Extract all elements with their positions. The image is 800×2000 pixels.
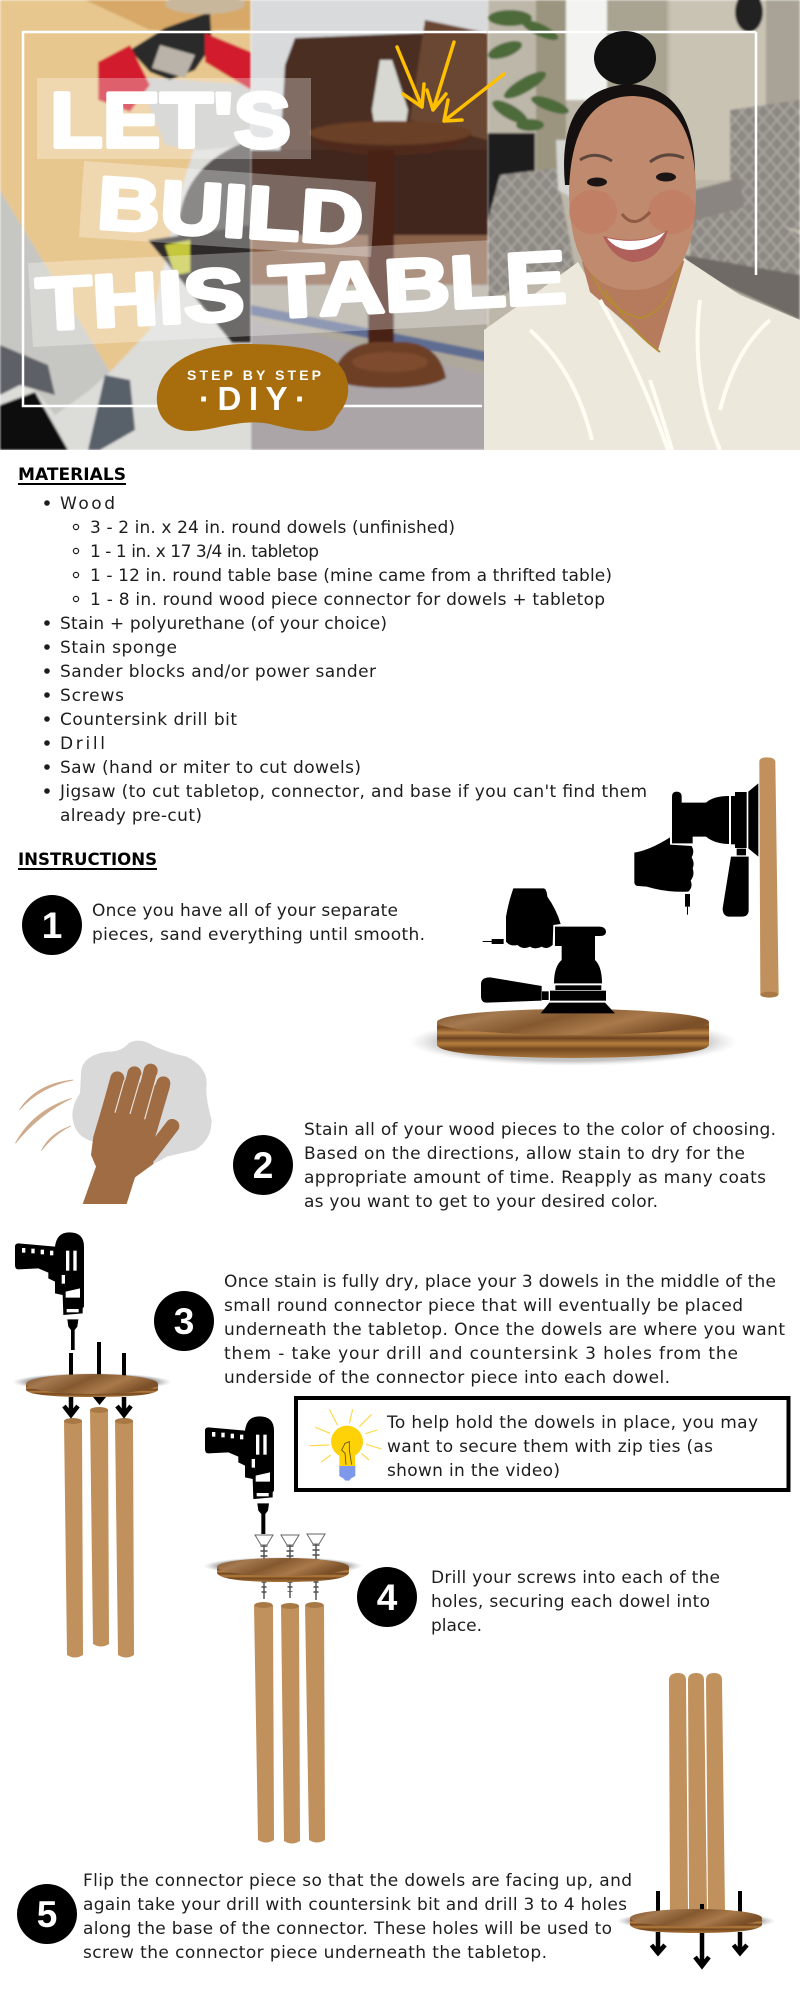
heading: instructions: INSTRUCTIONS — [18, 850, 157, 870]
materials list: Stain sponge — [60, 638, 177, 658]
step 4 text: Drill your screws into each of the — [431, 1568, 720, 1588]
step 2 text: as you want to get to your desired color. — [304, 1192, 658, 1212]
badge: step by step DIY: ·DIY· — [199, 380, 306, 417]
dowels and connector step 3 — [12, 1342, 172, 1658]
step 3 badge: 3 — [174, 1301, 194, 1342]
materials list: Drill — [60, 734, 105, 754]
icon: sander — [481, 888, 615, 1013]
icon: drill step 3 — [15, 1232, 84, 1350]
materials list — [44, 494, 647, 826]
step 5 badge: 5 — [37, 1894, 57, 1935]
step 1 badge — [22, 895, 82, 955]
materials list: 3 - 2 in. x 24 in. round dowels (unfinished) — [90, 518, 455, 538]
step 5 text: Flip the connector piece so that the dowels are facing up, and — [83, 1871, 632, 1891]
materials list: 1 - 1 in. x 17 3/4 in. tabletop — [90, 542, 319, 562]
title: THIS TABLE: THIS TABLE — [34, 235, 568, 346]
step 3 text: Once stain is fully dry, place your 3 dowels in the middle of the — [224, 1272, 776, 1292]
icon: drill — [634, 783, 758, 917]
step 1 text: Once you have all of your separate — [92, 901, 398, 921]
step 5 text: screw the connector piece underneath the tabletop. — [83, 1943, 547, 1963]
materials list: Stain + polyurethane (of your choice) — [60, 614, 387, 634]
step 3 text: small round connector piece that will eventually be placed — [224, 1296, 743, 1316]
icon: light bulb — [309, 1409, 382, 1481]
step 3 text — [224, 1272, 785, 1388]
step 5 text — [83, 1871, 632, 1963]
materials list: 1 - 8 in. round wood piece connector for dowels + tabletop — [90, 590, 605, 610]
materials list: Sander blocks and/or power sander — [60, 662, 376, 682]
step 5 text: along the base of the connector. These holes will be used to — [83, 1919, 612, 1939]
callout text — [386, 1413, 758, 1481]
step 4 text: holes, securing each dowel into — [431, 1592, 710, 1612]
materials list: Saw (hand or miter to cut dowels) — [60, 758, 361, 778]
step 3 text: underside of the connector piece into each dowel. — [224, 1368, 670, 1388]
materials list: Jigsaw (to cut tabletop, connector, and base if you can't find them — [59, 782, 647, 802]
callout text: To help hold the dowels in place, you may — [386, 1413, 758, 1433]
arrows pointing to table — [397, 42, 504, 121]
photo frame — [22, 30, 488, 408]
step 2 text: Stain all of your wood pieces to the color of choosing. — [304, 1120, 776, 1140]
icon: hand wiping with cloth — [15, 1041, 212, 1204]
step 2 text: Based on the directions, allow stain to dry for the — [304, 1144, 745, 1164]
step 3 text: underneath the tabletop. Once the dowels are where you want — [224, 1320, 785, 1340]
hero banner — [0, 0, 800, 450]
step 2 badge — [233, 1135, 293, 1195]
badge: step by step DIY: STEP BY STEP — [187, 367, 321, 383]
step 1 badge: 1 — [42, 905, 62, 946]
heading: materials: MATERIALS — [18, 465, 126, 485]
dowel upright with drill — [634, 757, 779, 998]
step 2 text: appropriate amount of time. Reapply as many coats — [304, 1168, 766, 1188]
step 4 text — [431, 1568, 720, 1636]
photo: woman in living room — [484, 0, 800, 450]
badge: step by step DIY — [157, 344, 348, 431]
step 1 text — [92, 901, 425, 945]
plant leaves — [486, 10, 571, 131]
materials list: Countersink drill bit — [60, 710, 237, 730]
step 5 badge — [17, 1884, 77, 1944]
callout text: want to secure them with zip ties (as — [387, 1437, 713, 1457]
title: LET'S: LET'S — [50, 76, 291, 164]
step 3 text: them - take your drill and countersink 3 holes from the — [224, 1344, 738, 1364]
step 2 text — [304, 1120, 776, 1212]
hair — [564, 84, 695, 185]
icon: drill step 4 — [205, 1416, 274, 1534]
step 4 text: place. — [431, 1616, 482, 1636]
callout text: shown in the video) — [387, 1461, 560, 1481]
step 5 text: again take your drill with countersink bit and drill 3 to 4 holes — [83, 1895, 627, 1915]
materials list: already pre-cut) — [60, 806, 202, 826]
step 3 badge — [154, 1291, 214, 1351]
translucent title bands — [28, 78, 488, 347]
dowels, connector and arrows step 5 — [616, 1673, 776, 1966]
step 2 badge: 2 — [253, 1145, 273, 1186]
callout: zip tie tip — [296, 1398, 788, 1490]
dowels, connector and screws step 4 — [203, 1534, 363, 1844]
step 1 text: pieces, sand everything until smooth. — [92, 925, 425, 945]
title: BUILD: BUILD — [95, 161, 366, 261]
photo: styled side table — [251, 0, 488, 450]
photo: wood and saw — [0, 0, 251, 450]
step 4 badge — [357, 1567, 417, 1627]
materials list: Screws — [60, 686, 124, 706]
materials list: 1 - 12 in. round table base (mine came from a thrifted table) — [90, 566, 612, 586]
materials list: Wood — [60, 494, 115, 514]
face — [569, 96, 696, 290]
screws — [255, 1534, 325, 1600]
step 4 badge: 4 — [377, 1577, 398, 1618]
bun — [594, 31, 656, 85]
wood disc with sander — [408, 888, 738, 1066]
